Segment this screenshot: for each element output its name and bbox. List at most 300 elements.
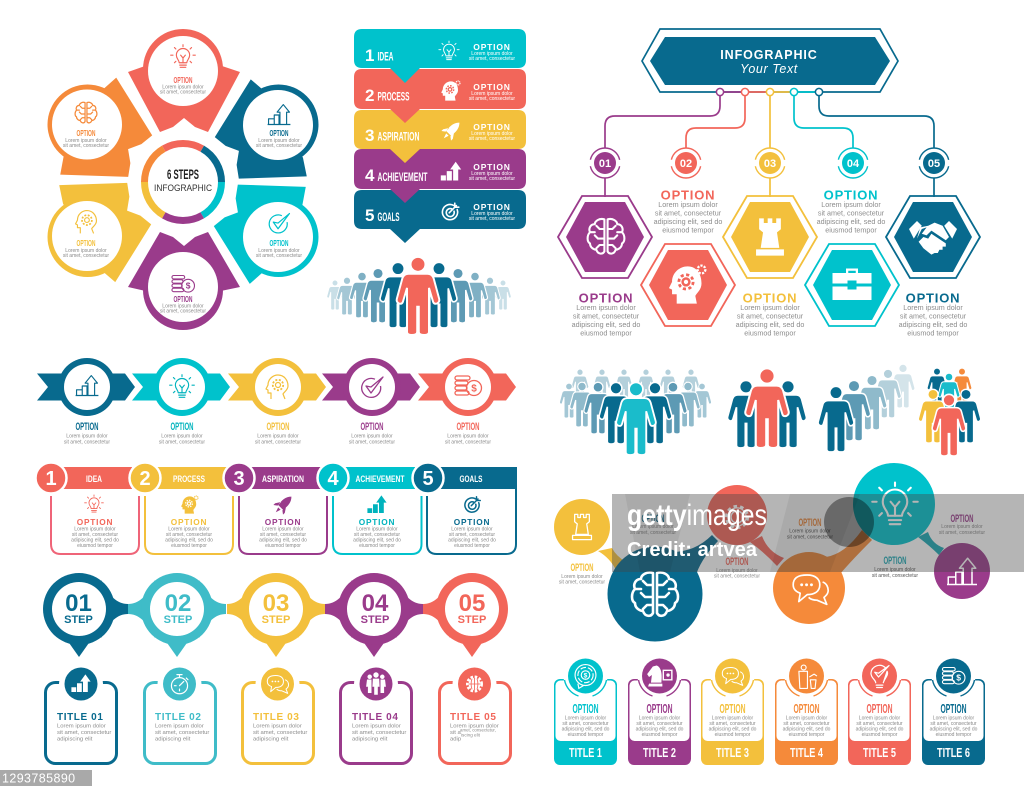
text: option 02: OPTION	[661, 188, 715, 202]
step: top: sit amet, consectetur	[160, 90, 206, 96]
tab bars	[60, 467, 517, 489]
card 4 content: Lorem ipsum dolor	[356, 526, 398, 532]
label: orange option: OPTION	[798, 517, 822, 529]
step: upper left	[63, 102, 109, 149]
badge 04: 04	[847, 158, 860, 170]
bar 3 aspiration: 3	[365, 126, 374, 145]
text: option 05: OPTION	[906, 290, 960, 306]
panel: numbered tab cards	[36, 462, 517, 554]
pin 02: 02	[165, 590, 191, 617]
option card 6: sit amet, consectetur	[930, 721, 977, 727]
card 2 content: adipiscing elit, sed do	[165, 538, 213, 544]
badge 03: 03	[764, 158, 776, 170]
option card 5: sit amet, consectetur	[856, 721, 903, 727]
card 3 content: OPTION	[265, 517, 301, 527]
option card 2: TITLE 2	[643, 746, 676, 760]
chevron step 5: Lorem ipsum dolor	[447, 434, 489, 440]
label: teal option: sit amet, consectetur	[630, 530, 676, 536]
step: lower left: Lorem ipsum dolor	[65, 248, 107, 254]
text: option 02: adipiscing elit, sed do	[654, 217, 722, 226]
chevron step 1	[37, 358, 135, 446]
badge 05	[919, 148, 949, 178]
option card 5: OPTION	[866, 702, 892, 716]
card 1 content: OPTION	[77, 517, 113, 527]
card 4 content: adipiscing elit, sed do	[353, 538, 401, 544]
chevron step 4: Lorem ipsum dolor	[351, 434, 393, 440]
card 1 content: adipiscing elit, sed do	[71, 538, 119, 544]
hexagon: handshake	[886, 196, 980, 278]
text: option 01: adipiscing elit, sed do	[572, 320, 640, 329]
label: purple option	[939, 513, 985, 536]
title card 02: TITLE 02	[155, 712, 201, 723]
step: upper right: Lorem ipsum dolor	[258, 138, 300, 144]
option card 6: OPTION	[940, 702, 966, 716]
title card 05	[440, 662, 510, 764]
people: crowd group one	[559, 369, 712, 455]
label: orange option: Lorem ipsum dolor	[789, 528, 831, 534]
bar 2 process: 2	[365, 86, 374, 105]
option card 3: sit amet, consectetur	[709, 721, 756, 727]
card 1 content: Lorem ipsum dolor	[74, 526, 116, 532]
bar 4 achievement: ACHIEVEMENT	[378, 172, 428, 184]
option card 3	[701, 654, 764, 765]
petal: cyan	[198, 157, 318, 287]
bar 3 aspiration: ASPIRATION	[378, 132, 420, 144]
bar 1 idea: 1	[365, 46, 374, 65]
chevron step 5	[418, 358, 516, 446]
image id tag: 1293785890	[2, 772, 76, 786]
option card 2	[628, 654, 691, 765]
hexagon: briefcase	[805, 244, 899, 326]
bar 4 achievement: OPTION	[473, 162, 511, 172]
option card 3: adipiscing elit, sed do	[709, 726, 757, 732]
bar 1 idea: sit amet, consectetur	[469, 56, 515, 62]
number discs	[36, 462, 444, 494]
chevron step 4	[322, 358, 420, 446]
step: lower left: sit amet, consectetur	[63, 253, 109, 259]
chain links	[598, 530, 944, 578]
option card 5: Lorem ipsum dolor	[859, 716, 901, 722]
text: option 04: sit amet, consectetur	[818, 208, 885, 218]
step: lower left: OPTION	[76, 238, 96, 248]
text: option 05: adipiscing elit, sed do	[899, 320, 967, 329]
text: option 05: Lorem ipsum dolor	[903, 303, 963, 312]
bar 5 goals	[354, 190, 526, 243]
card 1 content	[71, 495, 119, 549]
step: top: Lorem ipsum dolor	[162, 84, 204, 90]
chevron step 4: sit amet, consectetur	[349, 440, 395, 446]
card 3 content: adipiscing elit, sed do	[259, 538, 307, 544]
tab numbers and labels: PROCESS	[173, 474, 205, 485]
text: option 02: sit amet, consectetur	[655, 208, 722, 218]
hexagon: brain	[558, 196, 652, 278]
label: orange option	[787, 517, 833, 540]
bar 1 idea: OPTION	[473, 42, 511, 52]
chevron step 5: OPTION	[456, 421, 480, 433]
header banner: Your Text	[740, 62, 798, 76]
text: option 03	[736, 290, 804, 338]
option card 1: Lorem ipsum dolor	[565, 716, 607, 722]
option card 5: eiusmod tempor	[862, 732, 898, 738]
bar 2 process: Lorem ipsum dolor	[471, 91, 513, 97]
option card 5	[848, 654, 911, 765]
step: bottom: OPTION	[174, 294, 192, 304]
bar 1 idea: Lorem ipsum dolor	[471, 51, 513, 57]
card 3 content: eiusmod tempor	[265, 543, 301, 549]
panel: step pins	[43, 573, 508, 657]
chevron step 3: Lorem ipsum dolor	[257, 434, 299, 440]
tab numbers and labels: 3	[233, 468, 245, 490]
bar 5 goals: 5	[365, 206, 374, 225]
card 4 content	[353, 495, 401, 549]
text: option 03: adipiscing elit, sed do	[736, 320, 804, 329]
chevron step 1: OPTION	[76, 421, 99, 433]
step: upper right: OPTION	[270, 128, 288, 138]
pin 04: 04	[362, 590, 389, 617]
card 5 content: OPTION	[454, 517, 490, 527]
text: option 02: Lorem ipsum dolor	[658, 200, 718, 209]
step: top	[160, 45, 206, 96]
hub ring	[144, 144, 222, 220]
text: option 05: eiusmod tempor	[907, 328, 959, 338]
pin 02: STEP	[164, 614, 192, 626]
bar 3 aspiration: Lorem ipsum dolor	[471, 131, 513, 137]
title card 02: sit amet, consectetur	[155, 730, 209, 736]
card 4 content: OPTION	[359, 517, 395, 527]
card 2 content: OPTION	[171, 517, 207, 527]
option card 4: OPTION	[794, 702, 820, 716]
bar 2 process	[354, 69, 526, 123]
chevron step 4: OPTION	[360, 421, 384, 433]
bar 4 achievement: Lorem ipsum dolor	[471, 171, 513, 177]
watermark band	[612, 494, 1024, 572]
title card 04: Lorem ipsum dolor	[352, 724, 401, 730]
step: bottom: Lorem ipsum dolor	[162, 304, 204, 310]
bubble: gear	[707, 485, 767, 545]
pin 04: STEP	[361, 614, 389, 626]
badge 01	[590, 148, 620, 178]
chevron step 2	[132, 358, 230, 446]
petal centres	[52, 36, 313, 322]
option card 6	[922, 654, 985, 765]
label: cyan option	[872, 555, 918, 579]
watermark text	[627, 499, 767, 561]
step: lower right: sit amet, consectetur	[256, 253, 302, 259]
bar 4 achievement: sit amet, consectetur	[469, 176, 515, 182]
option card 2: OPTION	[646, 702, 672, 716]
petal: purple	[128, 232, 240, 330]
title card 03: Lorem ipsum dolor	[253, 724, 302, 730]
bar 2 process: PROCESS	[378, 92, 410, 104]
title card 05: TITLE 05	[450, 712, 496, 723]
title card 04	[340, 662, 412, 764]
label: orange option: sit amet, consectetur	[787, 534, 833, 540]
option card 2: sit amet, consectetur	[636, 721, 683, 727]
bubble: chart	[934, 543, 990, 599]
chevron step 3: sit amet, consectetur	[255, 440, 301, 446]
step: upper left: Lorem ipsum dolor	[65, 138, 107, 144]
label: cyan option: OPTION	[884, 555, 907, 567]
bar 1 idea: IDEA	[378, 52, 394, 64]
text: option 03: OPTION	[743, 290, 797, 306]
badge 02: 02	[680, 158, 692, 170]
panel: stacked list	[354, 29, 526, 243]
card 2 content: sit amet, consectetur	[166, 532, 212, 538]
bar 2 process: sit amet, consectetur	[469, 96, 515, 102]
step: upper right	[256, 105, 302, 149]
panel: hexagon flow	[558, 29, 980, 338]
step: lower right	[256, 214, 302, 259]
hexagon: chess rook	[723, 196, 817, 278]
text: option 04: eiusmod tempor	[825, 226, 877, 234]
connector lines	[605, 92, 934, 197]
title card 03	[242, 662, 314, 764]
card 4 content: sit amet, consectetur	[354, 532, 400, 538]
bar 4 achievement	[354, 149, 526, 203]
card 5 content: eiusmod tempor	[454, 543, 490, 549]
option card 1: adipiscing elit, sed do	[562, 726, 610, 732]
title card 04: TITLE 04	[352, 712, 398, 723]
watermark text: Credit: artvea	[627, 539, 758, 561]
step: upper left: OPTION	[76, 128, 96, 138]
pin 01: STEP	[64, 614, 93, 626]
label: purple option: Lorem ipsum dolor	[941, 524, 983, 530]
hexagon: head gears	[641, 244, 735, 326]
card 3 content: Lorem ipsum dolor	[262, 526, 304, 532]
label: teal option	[630, 513, 676, 536]
card 1 content: sit amet, consectetur	[72, 532, 118, 538]
option card 4: TITLE 4	[790, 746, 823, 760]
option card 4	[775, 654, 838, 765]
option card 3: TITLE 3	[716, 746, 749, 760]
option card 1: OPTION	[572, 702, 598, 716]
option card 4: Lorem ipsum dolor	[786, 716, 828, 722]
pin 03: 03	[263, 590, 289, 617]
option card 5: TITLE 5	[863, 746, 896, 760]
chevron step 3	[228, 358, 326, 446]
title card 03: TITLE 03	[253, 712, 299, 723]
pin 05: 05	[459, 590, 485, 617]
tab numbers and labels: 1	[45, 468, 57, 490]
title card 05: Lorem ipsum dolor	[450, 724, 499, 730]
option card 5: adipiscing elit, sed do	[856, 726, 904, 732]
option card 4: eiusmod tempor	[789, 732, 825, 738]
card 5 content: adipiscing elit, sed do	[448, 538, 496, 544]
bubble: chat	[773, 552, 845, 624]
panel: option title cards	[554, 654, 985, 765]
card 1 content: eiusmod tempor	[77, 543, 113, 549]
bar 3 aspiration	[354, 110, 526, 163]
title card 01: TITLE 01	[57, 712, 103, 723]
header banner: INFOGRAPHIC	[720, 48, 818, 62]
label: coral option: sit amet, consectetur	[714, 574, 760, 580]
label: cyan option: sit amet, consectetur	[872, 573, 918, 579]
title card 05: amet, consectetur,	[460, 728, 496, 732]
watermark text: gettyimages	[627, 499, 767, 532]
option card 1	[554, 654, 617, 765]
option card 6: adipiscing elit, sed do	[930, 726, 978, 732]
tab numbers and labels: 2	[139, 468, 151, 490]
bar 5 goals: GOALS	[378, 212, 400, 224]
bar 3 aspiration: OPTION	[473, 122, 511, 132]
bar 5 goals: OPTION	[473, 202, 511, 212]
pin 01: 01	[65, 590, 92, 617]
option card 6: Lorem ipsum dolor	[933, 716, 975, 722]
connector dots	[716, 88, 823, 96]
text: option 02	[654, 188, 722, 234]
petal: orange	[48, 75, 168, 205]
text: option 04	[817, 188, 885, 234]
petal: dark teal	[199, 76, 318, 206]
option card 6: TITLE 6	[937, 746, 970, 760]
hub title: 6 STEPS	[167, 166, 199, 182]
option card 2: eiusmod tempor	[642, 732, 678, 738]
label: teal option: OPTION	[642, 513, 665, 525]
card 3 content: sit amet, consectetur	[260, 532, 306, 538]
card 5 content: Lorem ipsum dolor	[451, 526, 493, 532]
label: purple option: OPTION	[950, 513, 974, 525]
chevron step 2: Lorem ipsum dolor	[161, 434, 203, 440]
option card 4: adipiscing elit, sed do	[783, 726, 831, 732]
title card 02: adipiscing elit	[155, 736, 191, 742]
pin 05	[436, 573, 508, 657]
option card 3: OPTION	[720, 702, 746, 716]
text: option 04: Lorem ipsum dolor	[821, 200, 881, 209]
tab numbers and labels: 5	[422, 468, 434, 490]
title card 05: iscing elit	[461, 732, 481, 738]
text: option 03: eiusmod tempor	[744, 328, 796, 338]
text: option 01	[572, 290, 640, 338]
tab numbers and labels	[45, 468, 482, 490]
label: coral option: OPTION	[726, 556, 749, 568]
option card 1: sit amet, consectetur	[562, 721, 609, 727]
text: option 01: sit amet, consectetur	[573, 312, 640, 320]
option card 3: Lorem ipsum dolor	[712, 716, 754, 722]
people: colourful team	[918, 368, 981, 456]
title card 04: adipiscing elit	[352, 736, 388, 742]
bar 5 goals: sit amet, consectetur	[469, 216, 515, 222]
badge 04	[838, 148, 868, 178]
card outlines	[51, 489, 516, 554]
title card 02	[144, 662, 216, 764]
card 5 content	[448, 497, 496, 549]
label: coral option	[714, 556, 760, 580]
label: yellow option: OPTION	[570, 562, 594, 574]
petal: yellow	[48, 155, 167, 285]
chevron step 5: sit amet, consectetur	[445, 440, 491, 446]
chevron step 1: sit amet, consectetur	[64, 440, 110, 446]
tab numbers and labels: 4	[327, 468, 339, 490]
bubble: rook	[554, 499, 610, 555]
badge 03	[755, 148, 785, 178]
tab numbers and labels: ACHIEVEMENT	[356, 474, 405, 485]
text: option 05: sit amet, consectetur	[900, 312, 967, 320]
tab numbers and labels: ASPIRATION	[262, 474, 304, 485]
panel: six step wheel	[48, 29, 318, 330]
option card 4: sit amet, consectetur	[783, 721, 830, 727]
step: lower right: Lorem ipsum dolor	[258, 248, 300, 254]
step: upper right: sit amet, consectetur	[256, 143, 302, 149]
label: yellow option: Lorem ipsum dolor	[561, 574, 603, 580]
petal: coral	[128, 29, 240, 132]
title card 05: sit a	[450, 730, 462, 736]
pin 02	[141, 573, 213, 657]
hub title: INFOGRAPHIC	[154, 183, 212, 194]
label: purple option: sit amet, consectetur	[939, 530, 985, 536]
text: option 01: eiusmod tempor	[580, 328, 632, 338]
text: option 04: adipiscing elit, sed do	[817, 217, 885, 226]
hub title	[154, 166, 212, 194]
label: coral option: Lorem ipsum dolor	[716, 568, 758, 574]
step: top: OPTION	[174, 75, 192, 85]
label: yellow option: sit amet, consectetur	[559, 580, 605, 586]
title card 01	[46, 662, 116, 764]
step: lower left	[63, 211, 109, 259]
step: bottom	[160, 276, 206, 314]
pin 01	[43, 573, 115, 657]
tab numbers and labels: GOALS	[460, 474, 482, 485]
image id tag	[0, 770, 92, 786]
card 5 content: sit amet, consectetur	[449, 532, 495, 538]
title card 01: adipiscing elit	[57, 736, 93, 742]
pin 03: STEP	[262, 614, 290, 626]
title card 04: sit amet, consectetur	[352, 730, 406, 736]
bar 3 aspiration: sit amet, consectetur	[469, 136, 515, 142]
badge 01: 01	[599, 158, 611, 170]
bubble: bulb	[853, 463, 935, 545]
people: crowd under list	[327, 257, 511, 335]
text: option 03: Lorem ipsum dolor	[740, 303, 800, 312]
title card 02: Lorem ipsum dolor	[155, 724, 204, 730]
pin 04	[338, 573, 410, 657]
tab numbers and labels: IDEA	[86, 474, 102, 485]
bar 4 achievement: 4	[365, 166, 375, 185]
text: option 01: Lorem ipsum dolor	[576, 303, 636, 312]
option card 1: eiusmod tempor	[568, 732, 604, 738]
step: upper left: sit amet, consectetur	[63, 143, 109, 149]
text: option 02: eiusmod tempor	[662, 226, 714, 234]
pin connectors	[101, 580, 450, 638]
card 3 content	[259, 492, 307, 549]
chevron step 1: Lorem ipsum dolor	[66, 434, 108, 440]
title card 01: Lorem ipsum dolor	[57, 724, 106, 730]
panel: chevron timeline	[37, 358, 516, 446]
step: bottom: sit amet, consectetur	[160, 308, 206, 314]
card 4 content: eiusmod tempor	[359, 543, 395, 549]
bubble: brain	[608, 546, 702, 642]
option card 1: TITLE 1	[569, 746, 602, 760]
title card 03: sit amet, consectetur	[253, 730, 307, 736]
label: cyan option: Lorem ipsum dolor	[874, 567, 916, 573]
panel: title cards	[46, 662, 510, 764]
title card 05: adip	[450, 736, 462, 742]
people: trio	[728, 368, 806, 448]
card 2 content: Lorem ipsum dolor	[168, 526, 210, 532]
title card 03: adipiscing elit	[253, 736, 289, 742]
bar 1 idea	[354, 29, 526, 83]
pin 05: STEP	[458, 614, 486, 626]
label: yellow option	[559, 562, 605, 586]
pin 03	[240, 573, 312, 657]
header banner	[642, 29, 898, 92]
step: lower right: OPTION	[270, 238, 288, 248]
option card 6: eiusmod tempor	[936, 732, 972, 738]
text: option 05	[899, 290, 967, 338]
chevron step 2: sit amet, consectetur	[159, 440, 205, 446]
title card 01: sit amet, consectetur	[57, 730, 111, 736]
badge 05: 05	[928, 158, 940, 170]
option card 2: adipiscing elit, sed do	[636, 726, 684, 732]
